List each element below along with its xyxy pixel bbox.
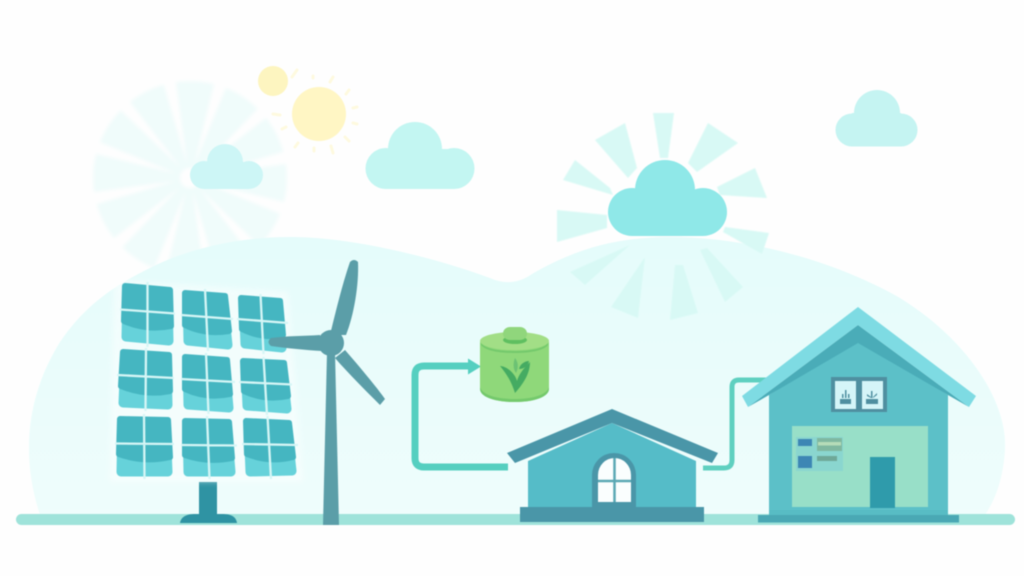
battery icon bbox=[480, 327, 549, 402]
large house upper window bbox=[831, 377, 887, 412]
large house roof bbox=[748, 325, 969, 407]
small house roof bbox=[507, 409, 718, 463]
large house bbox=[742, 307, 976, 522]
sun: large with rays bbox=[273, 70, 357, 153]
panel cells: dividers bbox=[115, 282, 298, 479]
small house bbox=[507, 409, 718, 522]
faint sunburst: left bbox=[88, 76, 292, 280]
cloud: top right bbox=[836, 90, 918, 146]
cloud: middle bbox=[366, 122, 474, 189]
sun: small bbox=[258, 66, 288, 96]
large house wall panel bbox=[792, 426, 928, 507]
small house base bbox=[520, 507, 704, 522]
arrow: connector to large house bbox=[703, 380, 766, 468]
large house door bbox=[870, 457, 895, 508]
panel cells: dark upper shading bbox=[119, 286, 293, 460]
arrow: house to battery bbox=[415, 358, 508, 467]
large house info sign bbox=[796, 437, 843, 471]
battery cap bbox=[503, 327, 527, 344]
panel cells: light base bbox=[121, 288, 292, 472]
background hills bbox=[29, 237, 1005, 515]
solar panel array bbox=[110, 280, 303, 482]
ground line bbox=[16, 514, 1015, 525]
cloud: centre with rays bbox=[608, 160, 727, 236]
faint sunburst: right bbox=[557, 113, 769, 320]
large house base bbox=[758, 515, 959, 522]
cloud: small left bbox=[190, 144, 263, 189]
wind turbine bbox=[268, 260, 385, 525]
solar panel stand bbox=[180, 482, 237, 523]
leaf symbol bbox=[500, 358, 530, 393]
small house window bbox=[592, 453, 636, 507]
